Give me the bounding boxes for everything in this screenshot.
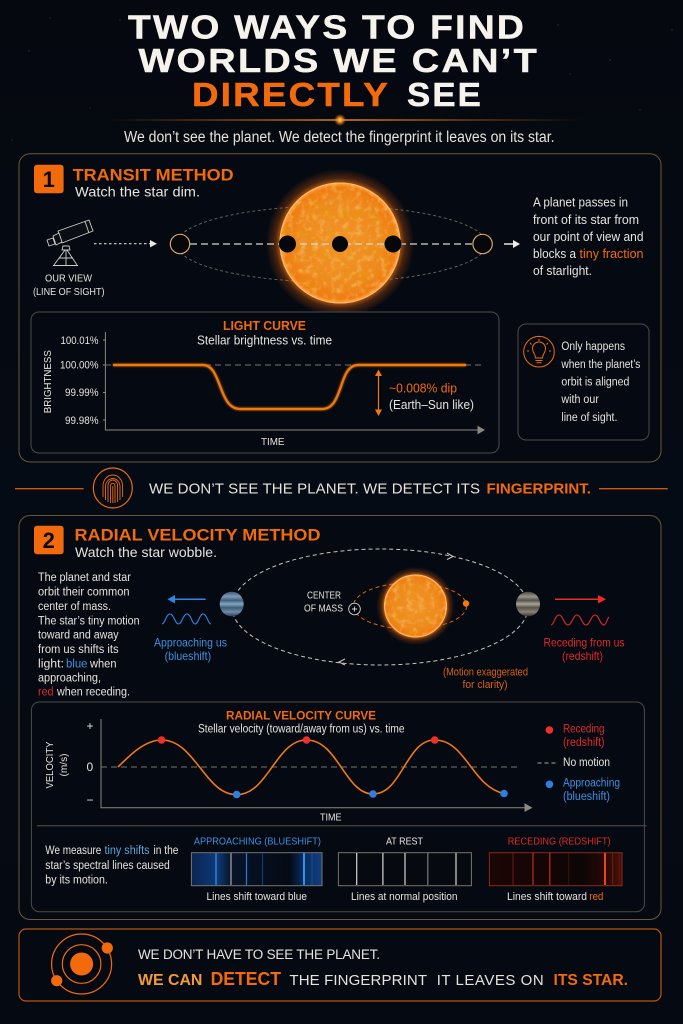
velocity curve — [118, 740, 504, 795]
spectrum: receding: RECEDING (REDSHIFT) — [508, 835, 611, 847]
text: wobble explanation: from us shifts its — [38, 644, 119, 656]
text: alignment note: orbit is aligned — [561, 376, 629, 388]
spectrum: approaching: APPROACHING (BLUESHIFT) — [194, 835, 321, 847]
note: motion exaggerated: for clarity) — [462, 679, 508, 691]
arrow: red receding — [555, 595, 606, 604]
text: wobble explanation: when receding. — [56, 686, 130, 698]
y axis title: BRIGHTNESS — [43, 350, 54, 413]
label: our view — [33, 273, 104, 298]
title: DIRECTLY — [192, 76, 390, 113]
light curve line — [113, 365, 466, 409]
conclusion line 2: IT LEAVES ON — [437, 972, 544, 989]
icon: telescope — [47, 220, 93, 266]
label: approaching us — [154, 635, 227, 663]
axes — [101, 719, 532, 811]
subheading: watch the star dim: Watch the star dim. — [75, 184, 200, 200]
text: wobble explanation: The star’s tiny motion — [38, 615, 140, 627]
y axis labels: 100.00% — [60, 359, 99, 371]
text: wobble explanation: The planet and star — [38, 572, 131, 584]
x axis title: TIME — [320, 812, 342, 824]
y axis labels: 99.98% — [65, 415, 99, 427]
text: wobble explanation: toward and away — [38, 630, 119, 642]
legend — [538, 724, 620, 803]
y axis labels — [86, 719, 94, 807]
label: center of mass: CENTER — [307, 589, 341, 601]
text: spectral shift explanation: tiny shifts — [104, 845, 150, 857]
conclusion line 2: WE CAN — [138, 972, 202, 989]
y axis title — [44, 742, 70, 788]
label: center of mass — [304, 589, 343, 615]
label: receding from us — [544, 635, 624, 663]
y axis labels — [60, 335, 99, 427]
label: approaching us: Approaching us — [154, 635, 227, 649]
banner text: WE DON’T SEE THE PLANET. WE DETECT ITS — [149, 481, 480, 498]
axes — [103, 332, 484, 434]
spectrum: receding — [489, 835, 622, 903]
label: receding from us: (redshift) — [562, 649, 603, 663]
note: motion exaggerated: (Motion exaggerated — [443, 667, 528, 679]
icon: fingerprint — [93, 468, 132, 508]
conclusion line 2 — [138, 968, 628, 989]
icon: light bulb — [524, 336, 554, 367]
arrow: exit — [504, 240, 520, 248]
badge: number 1 — [34, 165, 64, 193]
text: wobble explanation: when — [89, 658, 116, 670]
text: alignment note: with our — [560, 394, 599, 406]
fingerprint banner — [15, 468, 668, 508]
title divider with spark — [105, 114, 584, 126]
spectrum: at rest — [338, 835, 471, 903]
text: spectral shift explanation — [45, 845, 178, 886]
text: transit explanation: blocks a — [533, 246, 577, 261]
conclusion line 2: THE FINGERPRINT — [289, 972, 427, 989]
chart title: LIGHT CURVE — [223, 319, 306, 333]
title: SEE — [407, 76, 483, 113]
text: alignment note: line of sight. — [561, 412, 617, 424]
subheading: watch the star wobble: Watch the star wobble. — [75, 544, 217, 560]
chart title: RADIAL VELOCITY CURVE — [226, 708, 376, 722]
label: approaching us: (blueshift) — [165, 649, 211, 663]
panel: light curve — [31, 312, 499, 453]
text: spectral shift explanation: star’s spectral lines caused — [45, 860, 170, 872]
text: spectral shift explanation: by its motion. — [45, 874, 108, 886]
note: motion exaggerated — [443, 667, 528, 691]
orbit: star wobble — [353, 583, 467, 629]
y axis title: VELOCITY — [44, 742, 56, 788]
subtitle: We don’t see the planet. We detect the fingerprint it leaves on its star. — [124, 129, 554, 146]
title — [128, 8, 539, 113]
orbit ellipse — [176, 206, 486, 282]
conclusion line 2: ITS STAR. — [554, 972, 628, 989]
banner text: FINGERPRINT. — [486, 481, 591, 498]
spectrum: approaching — [191, 835, 322, 903]
baseline dashed — [105, 364, 484, 366]
label: our view: OUR VIEW — [45, 273, 92, 285]
orbit dot — [463, 600, 469, 607]
star — [376, 567, 454, 645]
wave: red — [551, 615, 609, 625]
y axis labels: 0 — [86, 760, 94, 774]
panel: radial velocity curve and spectra — [31, 702, 646, 912]
panel: transit method — [19, 154, 661, 462]
text: wobble explanation: light: — [38, 658, 64, 670]
text: spectral shift explanation: We measure — [45, 845, 101, 857]
label: center of mass: OF MASS — [304, 603, 343, 615]
conclusion line 2: DETECT — [211, 968, 282, 989]
y axis labels: 100.01% — [60, 335, 99, 347]
spectrum: approaching: Lines shift toward blue — [206, 891, 307, 903]
badge: number 2: 2 — [43, 528, 55, 553]
y axis labels: 99.99% — [65, 387, 99, 399]
legend: Receding — [563, 724, 604, 736]
arrowheads on orbit — [339, 553, 453, 665]
icon: orbiting planet system — [52, 934, 112, 994]
y axis labels: − — [86, 793, 94, 807]
heading: transit method: TRANSIT METHOD — [73, 166, 234, 184]
label: dip — [389, 381, 474, 412]
planets along transit — [170, 234, 492, 254]
title: TWO WAYS TO FIND — [128, 8, 526, 46]
text: wobble explanation — [38, 572, 140, 698]
transit path dashed line — [190, 243, 472, 245]
arrow: dip — [375, 370, 382, 416]
text: alignment note: when the planet’s — [561, 359, 641, 371]
label: dip: (Earth–Sun like) — [389, 397, 474, 412]
zero line — [101, 766, 517, 768]
text: transit explanation: our point of view and — [533, 229, 644, 244]
wave: blue — [162, 614, 211, 624]
y axis title: (m/s) — [58, 754, 70, 776]
badge: number 1: 1 — [43, 167, 55, 192]
text: transit explanation: tiny fraction — [580, 246, 644, 261]
spectrum: at rest: Lines at normal position — [351, 891, 458, 903]
label: dip: ~0.008% dip — [389, 381, 457, 396]
conclusion line 1: WE DON’T HAVE TO SEE THE PLANET. — [138, 947, 380, 962]
legend: (redshift) — [563, 737, 605, 749]
spectrum: receding: Lines shift toward — [507, 891, 587, 903]
chart subtitle: Stellar brightness vs. time — [197, 334, 332, 348]
x axis title: TIME — [261, 436, 284, 448]
text: wobble explanation: orbit their common — [38, 587, 130, 599]
legend: (blueshift) — [563, 791, 610, 803]
title: WORLDS WE CAN’T — [138, 42, 539, 79]
legend: No motion — [563, 757, 610, 769]
text: spectral shift explanation: in the — [154, 845, 178, 857]
spectrum: receding: red — [589, 891, 603, 903]
text: wobble explanation: approaching, — [38, 673, 101, 685]
text: wobble explanation: blue — [66, 658, 88, 670]
star with transit path — [266, 169, 414, 317]
curve markers — [158, 736, 508, 798]
y axis labels: + — [86, 719, 94, 733]
marker: center of mass — [349, 603, 360, 615]
label: our view: (LINE OF SIGHT) — [33, 286, 104, 298]
text: transit explanation: of starlight. — [533, 263, 592, 278]
text: wobble explanation: center of mass. — [38, 601, 111, 613]
orbit: planet — [232, 549, 528, 665]
text: transit explanation: A planet passes in — [533, 195, 628, 210]
arrow: blue approaching — [168, 595, 206, 604]
planet: receding side — [516, 592, 540, 616]
legend: Approaching — [563, 778, 620, 790]
label: receding from us: Receding from us — [544, 635, 624, 649]
badge: number 2 — [34, 526, 64, 554]
text: alignment note — [560, 341, 641, 424]
text: wobble explanation: red — [38, 686, 54, 698]
arrow: line of sight — [94, 240, 157, 247]
text: transit explanation — [533, 195, 644, 278]
planet: blue side — [220, 592, 244, 616]
panel: alignment note — [518, 324, 649, 440]
heading: radial velocity method: RADIAL VELOCITY METHOD — [74, 527, 321, 545]
panel: radial velocity method — [19, 516, 661, 920]
panel: conclusion — [19, 929, 661, 1001]
text: transit explanation: front of its star from — [533, 212, 639, 227]
chart subtitle: Stellar velocity (toward/away from us) vs. time — [198, 724, 404, 736]
spectrum: at rest: AT REST — [386, 835, 423, 847]
text: alignment note: Only happens — [561, 341, 625, 353]
